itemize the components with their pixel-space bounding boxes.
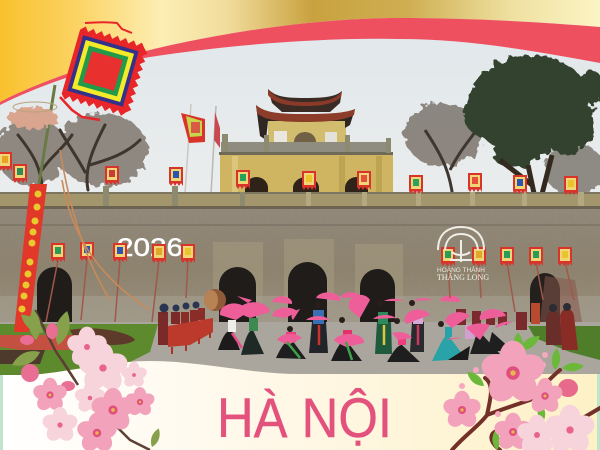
Hoàng Thành Thăng Long logo: HOÀNG THÀNH [437,265,485,274]
back row performers [456,309,527,330]
pink fans [220,292,513,347]
fan dancers [218,292,527,362]
lower roof [256,105,355,140]
standing men right [531,303,578,350]
recessed wall panels [213,242,263,302]
bare tree right [405,103,600,198]
small flags along the rampart [0,152,578,195]
upper pavilion wall [268,118,346,144]
gate balustrade [221,142,391,154]
pavilion window [274,131,287,142]
top roof [268,89,342,112]
title: HÀ NỘI [217,386,392,449]
red swoosh [0,18,600,105]
dancer skirts [218,322,512,362]
sky background [0,0,600,225]
green tree [464,55,600,198]
right cherry blossom branch [441,332,600,450]
gate body [220,153,393,197]
bottom cream panel [3,361,597,450]
mint edge strips [0,374,600,450]
dancer blouses [228,310,474,345]
bare trees left [0,114,148,190]
dancer heads [229,300,444,332]
wall flags on poles [46,242,574,322]
citadel brick wall [0,209,600,329]
flagpoles and banners [181,104,220,194]
plaza ground [0,322,600,382]
large ceremonial flag [60,22,150,120]
flower garden left [0,324,158,378]
left cherry blossom branch [10,309,162,450]
festival pole with red banner [8,85,150,332]
garden right [528,326,600,360]
rampart parapet [0,186,600,210]
2026 logo: 2026 [117,234,183,262]
wall arches [37,267,72,322]
citadel gate tower [219,89,393,197]
drummers and drum row [158,302,213,354]
green and coloured sashes [232,325,418,360]
Hoàng Thành Thăng Long logo: THĂNG LONG [437,273,489,282]
gate arches [245,177,268,196]
top gold band [0,0,600,102]
large drum [204,289,226,311]
Hoàng Thành Thăng Long logo [437,227,489,282]
